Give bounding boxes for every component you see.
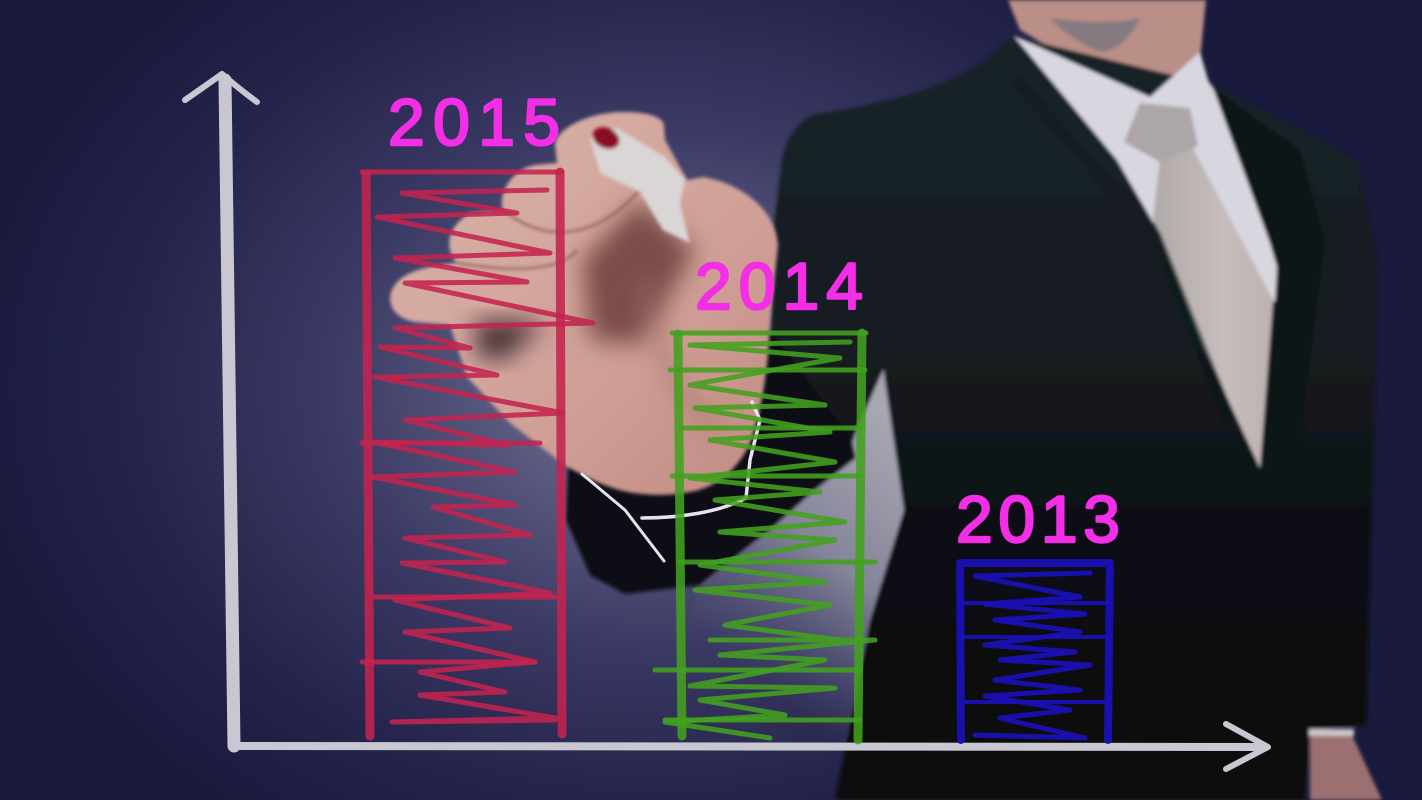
bar 2015 [362, 172, 593, 736]
label 2015: 2015 [388, 85, 560, 159]
thumb crease shadow [640, 280, 720, 430]
other hand [1310, 735, 1382, 800]
bar 2013 [958, 563, 1110, 740]
y axis arrow head [185, 74, 257, 102]
shirt cuff line [582, 402, 760, 561]
hand holding marker [390, 112, 778, 495]
lapel shadow line [1015, 80, 1230, 420]
marker [589, 123, 690, 243]
marker tip [589, 123, 623, 153]
y axis [225, 80, 234, 746]
bar cross lines [362, 172, 562, 662]
neck [1008, 0, 1206, 100]
palm and fingers [390, 112, 778, 495]
bar scribble [665, 342, 875, 738]
suit body [760, 36, 1378, 800]
bar outline [366, 172, 562, 736]
bar cross lines [958, 603, 1110, 702]
finger edges [457, 190, 640, 269]
tie blade [1153, 148, 1273, 468]
marker body [590, 128, 690, 243]
bar outline [678, 333, 862, 740]
label 2014: 2014 [695, 249, 863, 323]
axes [185, 74, 1268, 769]
forearm sleeve [566, 330, 856, 594]
businessman [566, 0, 1382, 800]
bar scribble [373, 190, 593, 722]
bar scribble [975, 573, 1090, 738]
other cuff [1309, 729, 1354, 736]
tie knot [1124, 103, 1198, 162]
label 2013: 2013 [956, 482, 1120, 556]
right lapel [1213, 88, 1325, 480]
dark palm shadow [582, 200, 695, 345]
shirt [1014, 36, 1277, 302]
bar cross lines [655, 333, 875, 720]
bar 2014 [655, 333, 875, 740]
x axis [232, 746, 1262, 747]
bar outline [960, 563, 1110, 740]
chin shadow [1050, 18, 1140, 52]
lower shadow under fingers [475, 320, 545, 360]
x axis arrow head [1226, 724, 1268, 769]
gap between arm and body [640, 362, 904, 800]
